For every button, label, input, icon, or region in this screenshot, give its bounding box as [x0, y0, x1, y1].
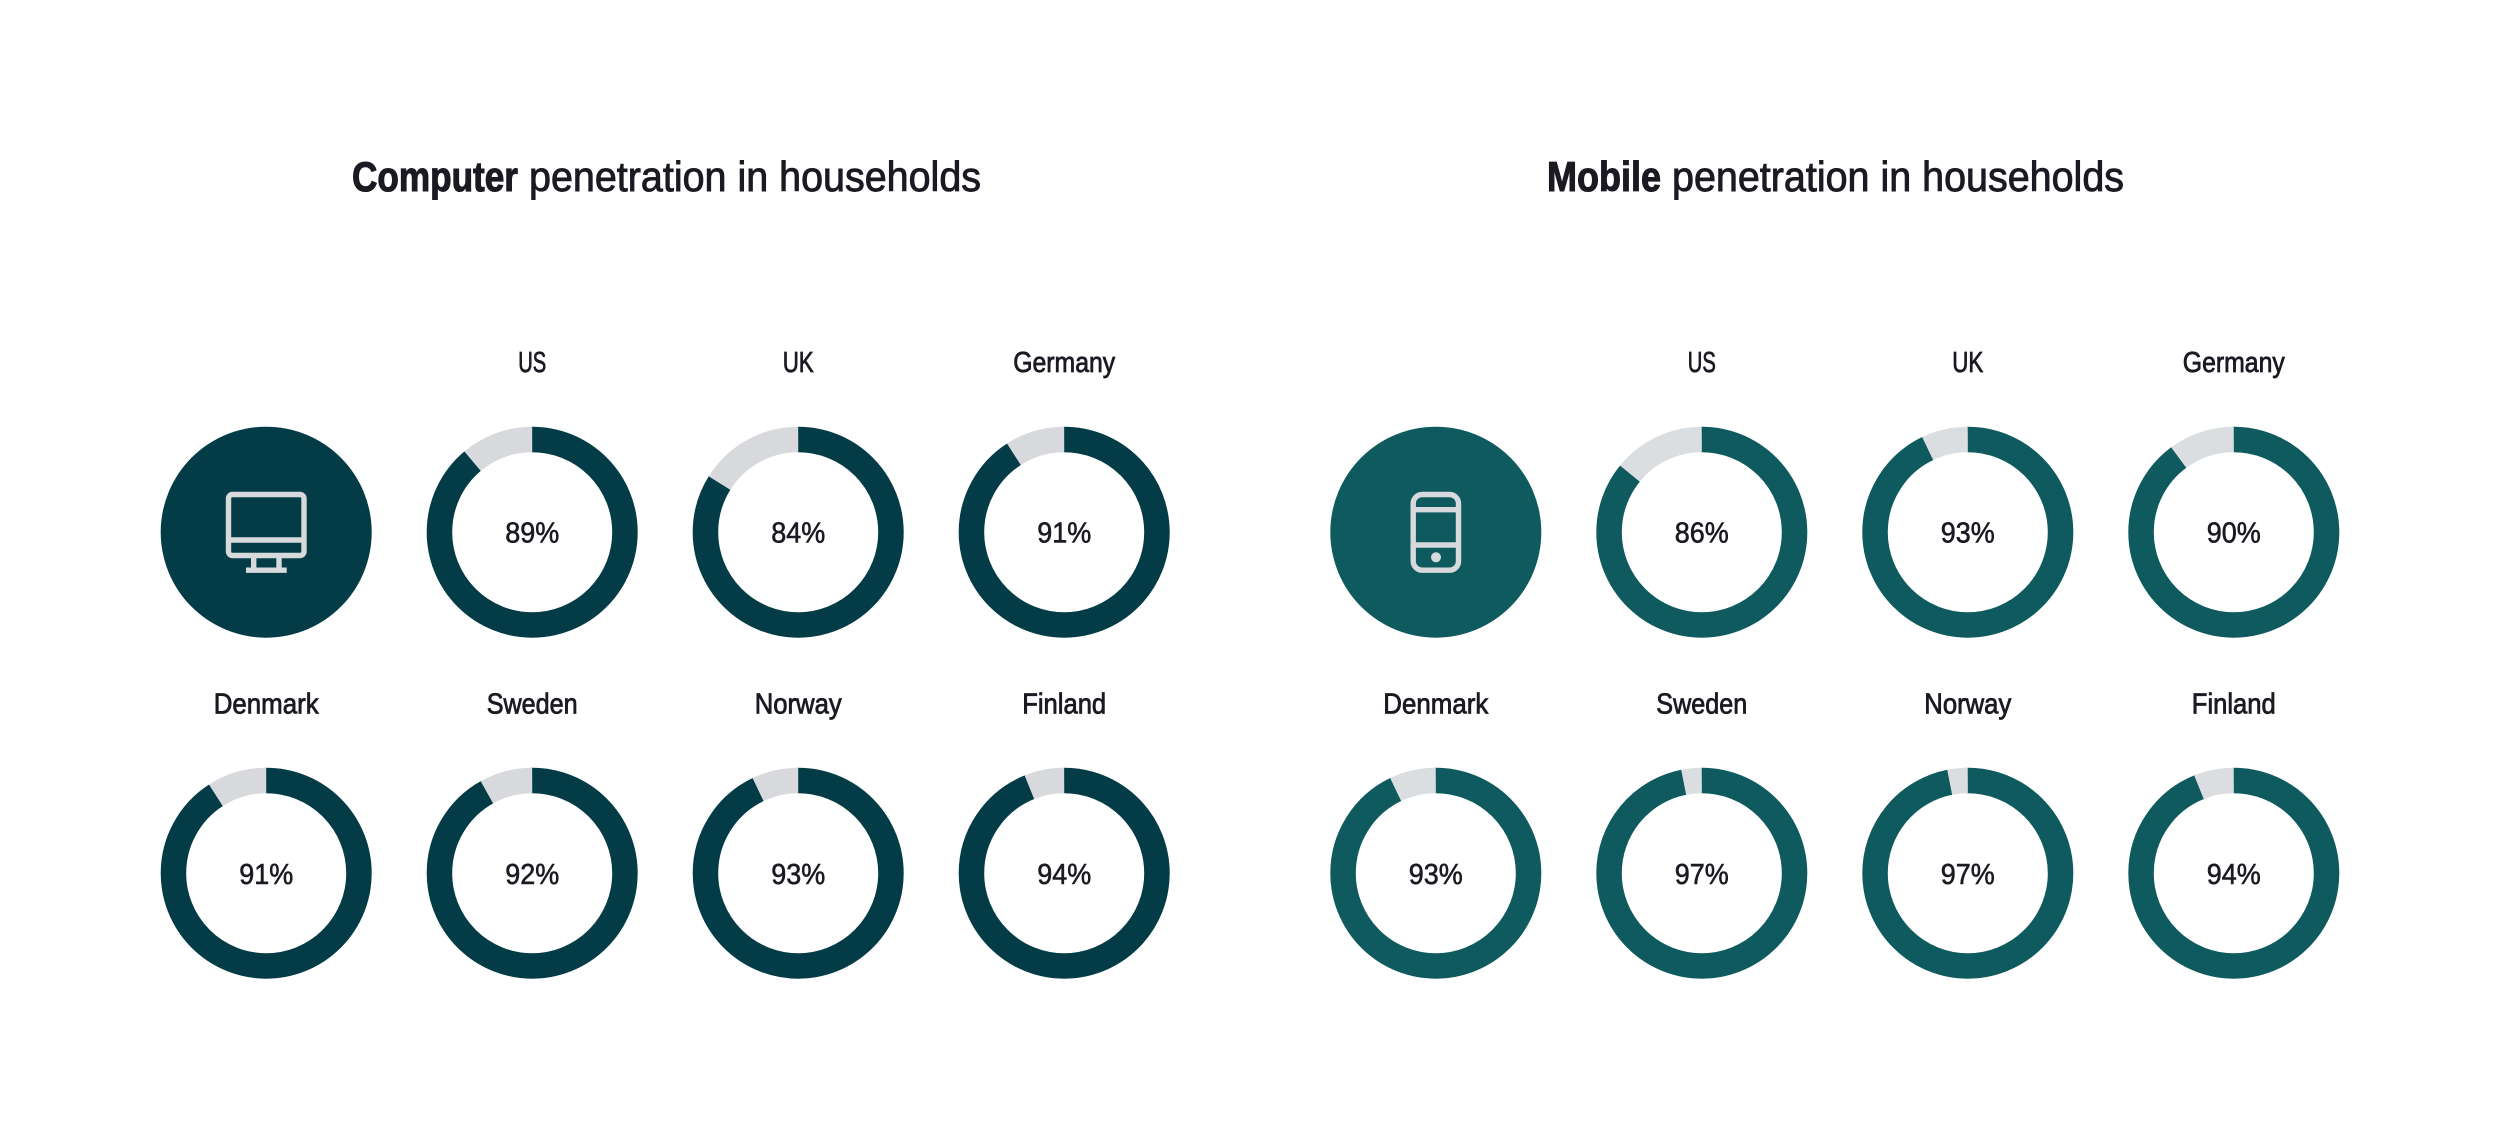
- donut: US 89%: 89%: [505, 518, 559, 550]
- donut: Finland 94%: 94%: [1037, 859, 1091, 891]
- donut: Norway 97%: 97%: [1941, 859, 1995, 891]
- panel: computer penetration: [161, 153, 1157, 966]
- donut: Germany 91%: 91%: [1037, 518, 1091, 550]
- donut: Germany 90%: Germany: [2183, 347, 2285, 379]
- donut: Denmark 91%: 91%: [239, 859, 293, 891]
- donut: UK 93%: [1875, 347, 2061, 625]
- donut: Denmark 93%: 93%: [1409, 859, 1463, 891]
- donut: Finland 94%: Finland: [1022, 688, 1106, 720]
- donut: US 86%: US: [1688, 347, 1716, 379]
- donut: Norway 93%: 93%: [771, 859, 825, 891]
- donut: Finland 94%: [2141, 688, 2327, 966]
- donut: Germany 90%: 90%: [2207, 518, 2261, 550]
- icon: mobile phone: [1330, 427, 1541, 638]
- donut: Sweden 97%: Sweden: [1656, 688, 1747, 720]
- donut: UK 93%: 93%: [1941, 518, 1995, 550]
- donut: US 86%: [1609, 347, 1795, 625]
- donut: Germany 91%: [971, 347, 1157, 625]
- donut: Norway 97%: Norway: [1924, 688, 2012, 720]
- heading: computer penetration: [352, 153, 981, 200]
- donut: Norway 93%: [705, 688, 891, 966]
- donut: Denmark 91%: [173, 688, 359, 966]
- donut: UK 84%: UK: [783, 347, 814, 379]
- donut: UK 93%: UK: [1952, 347, 1984, 379]
- icon: desktop computer: [161, 427, 372, 638]
- heading: computer penetration: penetration in households: [529, 153, 981, 200]
- donut: US 89%: US: [518, 347, 546, 379]
- donut: Finland 94%: Finland: [2192, 688, 2276, 720]
- donut: Sweden 92%: 92%: [505, 859, 559, 891]
- donut: Germany 91%: Germany: [1013, 347, 1116, 379]
- donut: Germany 90%: [2141, 347, 2327, 625]
- donut: UK 84%: [705, 347, 891, 625]
- heading: mobile penetration: penetration in households: [1672, 153, 2124, 200]
- heading: computer penetration: Computer: [352, 153, 518, 200]
- donut: Sweden 92%: [439, 688, 625, 966]
- donut: Sweden 92%: Sweden: [487, 688, 578, 720]
- panel: mobile penetration: [1330, 153, 2327, 966]
- donut: Norway 97%: [1875, 688, 2061, 966]
- donut: UK 84%: 84%: [771, 518, 825, 550]
- donut: Denmark 93%: Denmark: [1383, 688, 1489, 720]
- donut: US 89%: [439, 347, 625, 625]
- donut: Denmark 91%: Denmark: [214, 688, 319, 720]
- donut: US 86%: 86%: [1675, 518, 1729, 550]
- heading: mobile penetration: Mobile: [1547, 153, 1661, 200]
- donut: Denmark 93%: [1343, 688, 1529, 966]
- donut: Finland 94%: 94%: [2207, 859, 2261, 891]
- donut: Finland 94%: [971, 688, 1157, 966]
- donut: Sweden 97%: 97%: [1675, 859, 1729, 891]
- donut: Norway 93%: Norway: [755, 688, 842, 720]
- donut: Sweden 97%: [1609, 688, 1795, 966]
